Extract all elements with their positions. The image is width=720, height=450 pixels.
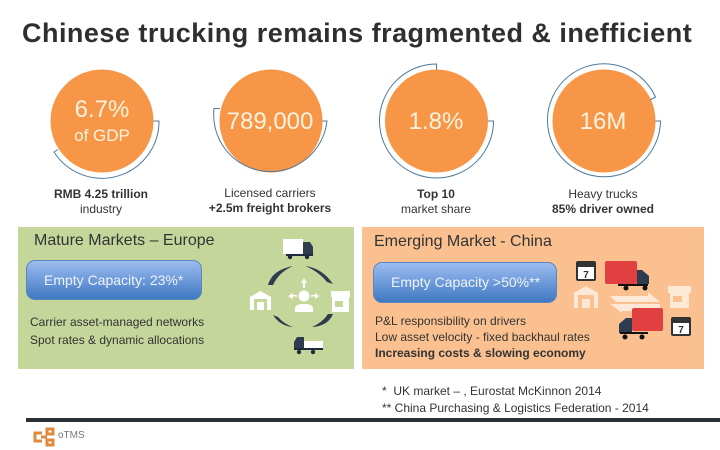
caption: licensed carriers: +2.5m freight brokers <box>209 201 331 215</box>
icon: exchange arrows <box>610 292 660 313</box>
caption: RMB 4.25 trillion industry <box>54 187 148 216</box>
stat value: of GDP: of GDP <box>74 126 130 145</box>
text: mature market bullets: Spot rates & dynamic allocations <box>30 333 204 347</box>
icon: calendar top <box>576 261 596 281</box>
text: mature market bullets <box>30 315 204 347</box>
icon: bottom truck <box>294 337 323 354</box>
icon: calendar bottom: 7 <box>678 325 684 336</box>
title: Chinese trucking remains fragmented & inefficient <box>22 18 692 48</box>
footnotes: ** China Purchasing & Logistics Federation - 2014 <box>382 401 649 415</box>
icon: red truck top <box>605 261 649 290</box>
icon: calendar top: 7 <box>583 270 589 281</box>
text: emerging market bullets: Low asset velocity - fixed backhaul rates <box>375 330 590 344</box>
icon: person with arrows <box>288 278 319 312</box>
button: empty capacity 23% <box>26 260 202 300</box>
stat value: 789,000: 789,000 <box>227 108 313 135</box>
text: emerging market bullets: Increasing costs & slowing economy <box>375 346 586 360</box>
footnotes <box>382 384 649 415</box>
caption: top 10 market share: Top 10 <box>417 187 455 201</box>
stat value: 16M: 16M <box>580 108 626 135</box>
icon: shop faded <box>668 286 691 308</box>
heading: emerging market: Emerging Market - China <box>374 233 552 250</box>
button: empty capacity 23%: Empty Capacity: 23%* <box>44 272 183 288</box>
icon: calendar bottom <box>671 317 691 336</box>
caption: heavy trucks: 85% driver owned <box>552 202 654 216</box>
icon: warehouse faded <box>574 286 598 308</box>
caption: RMB 4.25 trillion industry: RMB 4.25 trillion <box>54 187 148 201</box>
panel: mature markets background <box>18 227 354 369</box>
icon: cycle arrows <box>268 266 333 327</box>
stat circle: 789,000 <box>214 70 327 172</box>
caption: RMB 4.25 trillion industry: industry <box>80 202 122 216</box>
caption: heavy trucks: Heavy trucks <box>568 187 638 201</box>
button: empty capacity 50% <box>373 262 557 303</box>
stat circle: 16M <box>548 64 660 177</box>
icon: warehouse <box>250 291 271 310</box>
caption: top 10 market share: market share <box>401 202 471 216</box>
caption: licensed carriers <box>209 186 331 215</box>
text: emerging market bullets: P&L responsibility on drivers <box>375 314 526 328</box>
stat circles <box>50 63 661 179</box>
button: empty capacity 50%: Empty Capacity >50%** <box>391 274 540 290</box>
logo: oTMS: oTMS <box>58 430 85 441</box>
footnotes: * UK market – , Eurostat McKinnon 2014 <box>382 384 601 398</box>
panel: emerging market background <box>362 227 704 369</box>
heading: mature markets: Mature Markets – Europe <box>34 232 215 249</box>
stat value: 6.7%: 6.7% <box>75 96 129 123</box>
stat circle: 1.8% <box>380 64 494 178</box>
logo: oTMS <box>34 428 85 446</box>
footer bar <box>26 418 720 422</box>
text: emerging market bullets <box>375 314 590 360</box>
icon: red truck bottom <box>619 308 663 340</box>
caption: heavy trucks <box>552 187 654 216</box>
caption: licensed carriers: Licensed carriers <box>224 186 316 200</box>
icon: top truck <box>283 239 313 259</box>
text: mature market bullets: Carrier asset-managed networks <box>30 315 204 329</box>
icon: shop <box>331 291 350 312</box>
stat value: 1.8%: 1.8% <box>409 108 463 135</box>
caption: top 10 market share <box>401 187 471 216</box>
stat circle: 6.7% of GDP <box>50 70 159 178</box>
